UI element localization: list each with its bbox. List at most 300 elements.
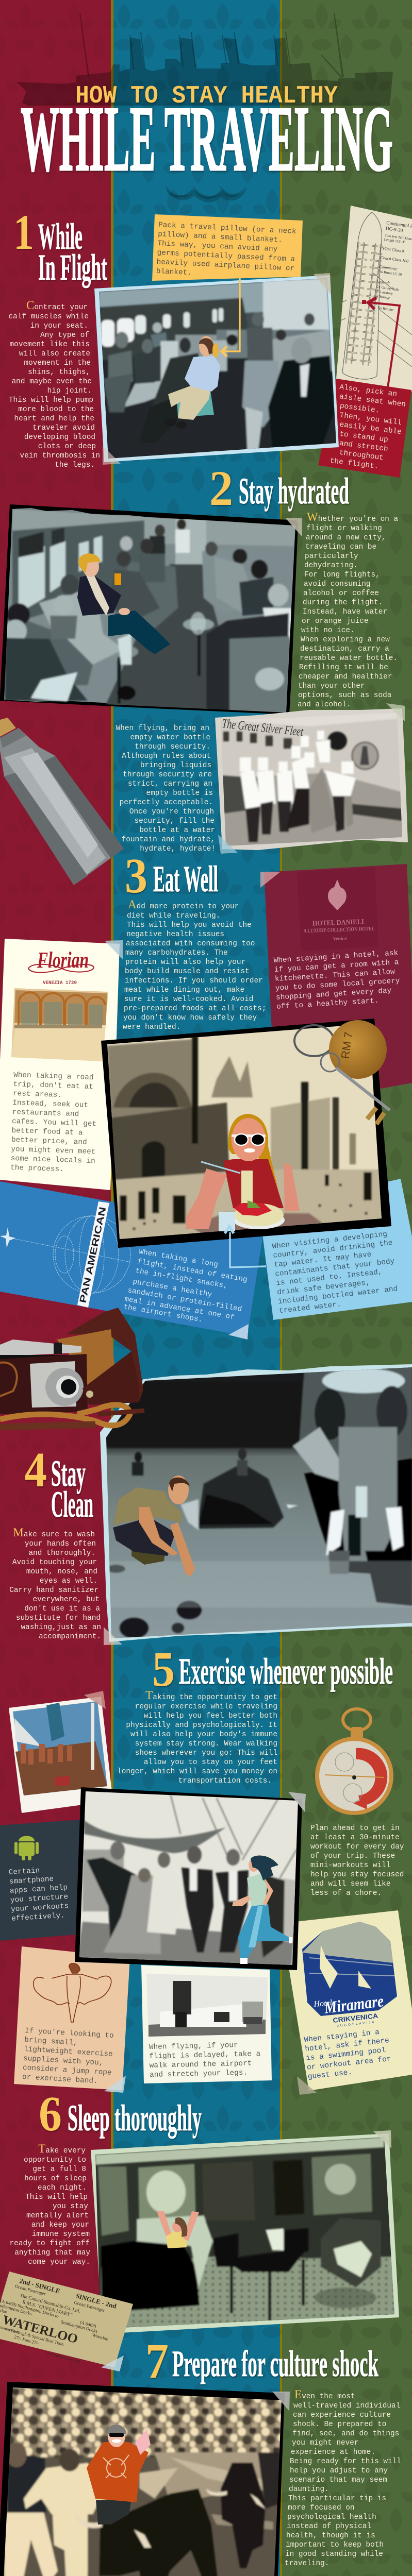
text: calf muscles: movement in the	[24, 359, 91, 367]
text: calf muscles: vein thrombosis in	[20, 452, 100, 460]
text: exercise: system stay strong. Wear walking	[135, 1740, 277, 1748]
icon: hotel crest	[328, 879, 347, 910]
text: exercise: shoes wherever you go: This will	[135, 1749, 277, 1757]
panel: android apps: smartphone	[9, 1875, 54, 1886]
text: culture shock: This particular tip is	[288, 2495, 386, 2503]
illustrated woman eating	[186, 1114, 300, 1231]
text: exercise: regular exercise while traveling	[135, 1703, 277, 1711]
panel: airport card: walk around the airport	[150, 2059, 252, 2070]
panel: jump rope card: If you're looking to	[25, 2027, 114, 2040]
panel: jump rope card: consider a jump rope	[23, 2064, 112, 2077]
text: Clean	[51, 1484, 93, 1525]
text: calf muscles	[9, 299, 100, 469]
panel: pan american	[0, 1181, 263, 1335]
panel: florian card: better price, and	[11, 1136, 87, 1147]
text: culture shock: daunting.	[289, 2485, 329, 2494]
text: culture shock: experience at home.	[291, 2448, 375, 2456]
panel: android apps: apps can help	[10, 1884, 68, 1895]
text: culture shock: can experience culture	[293, 2411, 391, 2419]
text: culture shock: help you adjust to any	[290, 2467, 388, 2475]
text: plan ahead: less of a chore.	[310, 1889, 382, 1897]
panel: pan american: flight, instead of eating	[137, 1258, 248, 1284]
seat map: No Recline	[377, 306, 394, 312]
icon: waterloo ticket: Southampton Docks	[60, 2319, 98, 2334]
illustrated tourist	[87, 2425, 151, 2524]
callout: aisle seat: the flight.	[329, 457, 379, 471]
panel: airport card: flight is delayed, take a	[149, 2050, 261, 2061]
panel: light blue card: tap water. It may have	[274, 1250, 372, 1269]
heading: 1 while in flight	[13, 205, 107, 288]
panel: light blue card: is not used to. Instead,	[276, 1268, 383, 1288]
icon: android robot	[14, 1836, 39, 1860]
heading: 3 eat well	[125, 848, 218, 903]
text: eat well: Add more protein to your	[128, 898, 239, 911]
text: stay clean: Avoid touching your	[12, 1558, 97, 1567]
panel: hotel danieli: A LUXURY COLLECTION HOTEL	[303, 926, 375, 934]
text: calf muscles: clots or deep	[38, 443, 96, 451]
text: calf muscles: more blood to the	[18, 405, 94, 414]
text: stay hydrated: Whether you're on a	[307, 511, 399, 523]
arrow: safe water	[225, 1226, 266, 1267]
text: calf muscles: and maybe even the	[12, 378, 92, 386]
callout: travel pillow: germs potentially passed from a	[157, 249, 295, 264]
text: eat well: meat while dining out, make	[124, 986, 244, 994]
callout: aisle seat	[318, 379, 411, 478]
seat map: Length 119'-3"	[384, 238, 406, 245]
callout: travel pillow: blanket.	[156, 267, 192, 277]
text: plan ahead: Plan ahead to get in	[310, 1824, 400, 1833]
panel: pan american: meal in advance at one of	[124, 1295, 235, 1322]
text: stay clean: washing,just as an	[21, 1623, 101, 1632]
heading: 3 eat well: 3	[125, 848, 147, 903]
panel: light blue card: country, avoid drinking the	[273, 1239, 393, 1260]
text: plan ahead: at least a 30-minute	[310, 1834, 400, 1842]
photo: elephants	[100, 1364, 412, 1645]
panel: hotel miramare: hotel, ask if there	[305, 2037, 390, 2054]
panel: hotel danieli: HOTEL DANIELI	[312, 918, 364, 928]
text: culture shock: more focused on	[288, 2504, 355, 2512]
text: stay clean: everywhere, but	[32, 1596, 100, 1604]
callout: aisle seat: easily be able	[339, 421, 402, 436]
heading: 4 stay clean: Stay	[51, 1453, 86, 1494]
text: sleep thoroughly: This will help	[25, 2193, 88, 2201]
panel: florian card: better food at a	[11, 1127, 83, 1138]
text: stay clean: Make sure to wash	[13, 1526, 95, 1539]
text: plan ahead: of your trip. These	[310, 1852, 395, 1860]
icon: waterloo ticket: For conditions see over	[46, 2351, 80, 2364]
text: calf muscles: movement like this	[10, 341, 90, 349]
photo: venice square	[101, 1019, 391, 1248]
text: stay hydrated: around a new city,	[306, 534, 386, 542]
heading: 5 exercise: 5	[152, 1641, 175, 1697]
icon: stopwatch	[315, 1709, 393, 1815]
panel: hotel danieli: you to do some local grocery	[275, 977, 400, 993]
text: water bottle: Although rules about	[122, 752, 211, 760]
text: sleep thoroughly: ready to fight off	[10, 2240, 90, 2248]
text: water bottle	[116, 724, 216, 853]
text: stay clean	[9, 1526, 101, 1641]
text: water bottle: Once you're through	[129, 808, 214, 816]
text: calf muscles: Any type of	[40, 331, 89, 340]
text: eat well: This will help you avoid the	[127, 921, 252, 929]
panel: florian card: trip, don't eat at	[13, 1080, 93, 1091]
text: stay hydrated: destination, carry a	[300, 645, 389, 653]
heading: 6 sleep thoroughly: 6	[39, 2086, 62, 2141]
panel: florian card: you might even meet	[11, 1145, 96, 1156]
text: eat well: were handled.	[123, 1023, 180, 1031]
callout: aisle seat: to stand up	[339, 430, 389, 444]
text: stay hydrated: than your other	[298, 682, 365, 690]
icon: waterloo ticket: SINGLE - 2nd	[75, 2292, 118, 2310]
text: water bottle: bottle at a water	[139, 826, 215, 835]
text: eat well: many carbohydrates. The	[125, 949, 228, 957]
text: stay clean: and thoroughly.	[28, 1549, 95, 1557]
text: calf muscles: will also create	[19, 350, 90, 358]
text: stay clean: don't use it as a	[24, 1605, 100, 1613]
callout: aisle seat: throughout	[339, 449, 384, 462]
panel: light blue card: When visiting a developing	[272, 1230, 388, 1251]
panel: pan american: the airport shops.	[123, 1303, 203, 1325]
text: exercise: Taking the opportunity to get	[145, 1689, 277, 1702]
panel: hotel danieli: shopping and get every day	[276, 987, 392, 1002]
text: sleep thoroughly: and keep your	[31, 2221, 89, 2229]
label: miramare badge: Hotel	[313, 1998, 333, 2009]
panel: florian card: restaurants and	[12, 1108, 79, 1118]
heading: 2 stay hydrated	[209, 461, 349, 516]
panel: florian card: Florian	[37, 947, 89, 973]
text: stay hydrated: alcohol or coffee	[303, 589, 379, 598]
illustrated man	[113, 1476, 195, 1577]
text: exercise: transportation costs.	[178, 1777, 272, 1785]
seat map: Comments:	[379, 264, 398, 272]
text: sleep thoroughly: get a full 8	[32, 2165, 86, 2174]
panel: android apps: effectively.	[11, 1912, 65, 1923]
panel: android apps: Certain	[8, 1867, 40, 1877]
panel: android apps: you structure	[10, 1893, 69, 1905]
icon: globe and plane	[10, 1216, 131, 1293]
text: stay clean: substitute for hand	[16, 1614, 101, 1622]
illustrated runner	[232, 1855, 292, 1964]
text: eat well	[123, 898, 266, 1031]
text: calf muscles: hip joint.	[47, 387, 92, 395]
panel: jump rope card: supplies with you,	[23, 2055, 104, 2067]
text: water bottle: empty water bottle	[130, 734, 210, 742]
callout: aisle seat: and stretch	[339, 439, 388, 453]
text: stay hydrated: For long flights,	[304, 571, 380, 579]
text: culture shock: find, see, and do things	[292, 2430, 399, 2438]
heading: 1 while in flight: While	[38, 216, 83, 257]
panel: hotel miramare: guest use.	[307, 2069, 353, 2081]
icon: camera	[0, 1308, 144, 1427]
icon: waterloo ticket: 27/- Fare 27/-	[13, 2334, 40, 2346]
panel: pan american: When taking a long	[138, 1248, 219, 1269]
text: calf muscles: This will help pump	[9, 396, 93, 404]
text: stay hydrated	[298, 511, 399, 709]
panel: jump rope card: or exercise band.	[22, 2073, 98, 2086]
panel: light blue card	[258, 1179, 412, 1320]
text: plan ahead: help you stay focused	[310, 1871, 404, 1879]
text: culture shock: health, though it is	[286, 2532, 375, 2540]
panel: florian card: some nice locals in	[10, 1155, 95, 1165]
panel: jump rope card: bring small,	[24, 2036, 78, 2047]
icon: waterloo ticket: R.M.S. "QUEEN MARY"	[22, 2300, 73, 2318]
panel: jump rope card	[14, 1946, 130, 2090]
panel: hotel miramare: When staying in a	[304, 2028, 380, 2044]
text: stay clean: accompaniment.	[39, 1633, 101, 1641]
text: water bottle: empty bottle is	[146, 789, 213, 798]
label: miramare badge: CRIKVENICA	[333, 2012, 378, 2024]
panel: light blue card: including bottled water and	[277, 1285, 398, 1306]
text: eat well: associated with consuming too	[126, 940, 255, 948]
text: exercise: longer, which will save you money on	[117, 1768, 277, 1776]
text: stay hydrated: traveling can be	[305, 543, 376, 551]
text: eat well: infections. If you should order	[125, 977, 263, 985]
text: calf muscles: traveler avoid	[32, 424, 95, 432]
panel: hotel miramare	[282, 1910, 412, 2091]
text: culture shock	[285, 2388, 401, 2568]
text: stay hydrated: options, such as soda	[298, 691, 392, 700]
painting: cafe arcade	[11, 988, 108, 1061]
panel: florian card: Instead, seek out	[12, 1099, 88, 1110]
text: stay hydrated: avoid consuming	[304, 580, 371, 588]
text: calf muscles: developing blood	[24, 433, 95, 442]
photo: great silver fleet	[215, 703, 408, 855]
text: sleep thoroughly: opportunity to	[24, 2156, 86, 2164]
text: plan ahead: and will seem like	[310, 1880, 390, 1888]
text: eat well: you don't know how safely they	[123, 1014, 257, 1022]
text: exercise: will also help your body's immune	[130, 1731, 277, 1739]
text: water bottle: strict, carrying an	[128, 780, 212, 788]
panel: hotel danieli: Venice	[333, 936, 347, 942]
text: culture shock: scenario that may seem	[289, 2476, 387, 2484]
icon: waterloo ticket: (A 6469) Southampton Docks to	[0, 2298, 60, 2319]
panel: light blue card: contaminants that your body	[275, 1258, 395, 1279]
text: exercise: will help you feel better both	[144, 1712, 277, 1720]
text: sleep thoroughly: immune system	[32, 2230, 90, 2239]
panel: hotel danieli	[264, 864, 412, 1089]
icon: waterloo ticket: WATERLOO	[1, 2313, 79, 2346]
text: stay hydrated: Instead, have water	[303, 608, 387, 616]
text: water bottle: perfectly acceptable.	[120, 799, 213, 807]
text: stay hydrated: and alcohol.	[298, 701, 351, 709]
callout: travel pillow: heavily used airplane pillow or	[156, 258, 294, 273]
icon: waterloo ticket: Waterloo	[91, 2332, 109, 2342]
panel: pan american: the in-flight snacks,	[135, 1267, 228, 1291]
panel: android apps	[0, 1820, 80, 1941]
text: sleep thoroughly: each night.	[38, 2184, 87, 2192]
text: eat well: pre-prepared foods at all costs;	[124, 1005, 266, 1013]
text: stay clean: eyes as well.	[40, 1577, 97, 1585]
panel: hotel danieli: off to a healthy start.	[276, 997, 379, 1011]
icon: waterloo ticket: (A 6469)	[79, 2319, 97, 2329]
panel: pan american: sandwich or protein-filled	[127, 1286, 242, 1314]
heading: 2 stay hydrated: 2	[209, 461, 233, 516]
text: stay hydrated: flight or walking	[306, 524, 382, 533]
panel: florian card: VENEZIA 1720	[43, 980, 77, 986]
text: stay hydrated: with no ice.	[301, 626, 355, 635]
text: calf muscles: calf muscles while	[9, 313, 89, 321]
text: calf muscles: Contract your	[26, 299, 88, 312]
text: exercise: physically and psychologically. It	[126, 1721, 277, 1730]
text: culture shock: you might never	[292, 2439, 359, 2447]
callout: travel pillow: pillow) and a small blanket.	[158, 230, 283, 245]
panel: florian card	[0, 939, 120, 1190]
text: exercise: allow you to stay on your feet	[144, 1758, 277, 1767]
text: Eat Well	[153, 858, 218, 900]
panel: airport card: When flying, if your	[149, 2041, 238, 2052]
seat map: First Class 8	[382, 246, 404, 253]
panel: airport card	[141, 1965, 272, 2083]
text: culture shock: in good standing while	[285, 2550, 383, 2558]
text: stay hydrated: dehydrating.	[304, 562, 358, 570]
text: plan ahead: workout for every day	[310, 1843, 404, 1851]
illustration: jump rope girl	[34, 1963, 111, 2022]
seat map	[336, 206, 412, 392]
icon: waterloo ticket: 2nd - SINGLE	[19, 2277, 61, 2295]
text: stay hydrated: particularly	[305, 552, 358, 561]
icon: room key: RM 7	[339, 1031, 355, 1060]
text: sleep thoroughly: anything that may	[14, 2249, 90, 2257]
panel: pan american: PAN AMERICAN	[77, 1206, 108, 1304]
text: sleep thoroughly	[10, 2142, 90, 2266]
callout: aisle seat: aisle seat when	[339, 393, 406, 409]
icon: waterloo ticket: Ocean Passenger	[14, 2283, 46, 2297]
text: eat well: sure it is well-cooked. Avoid	[124, 995, 253, 1004]
text: sleep thoroughly: mentally alert	[26, 2212, 89, 2220]
panel: florian card: When taking a road	[13, 1071, 94, 1082]
text: culture shock: important to keep both	[286, 2541, 384, 2549]
panel: hotel danieli: if you can get a room with a	[274, 958, 399, 974]
panel: hotel danieli: When staying in a hotel, ask	[273, 949, 399, 965]
icon: metal bottle	[0, 718, 124, 885]
ship silhouette	[17, 13, 393, 106]
text: stay hydrated: cheaper and healthier	[299, 673, 392, 681]
seat map: ST Storage	[374, 294, 390, 300]
photo: airplane cabin	[94, 275, 340, 464]
panel: light blue card: treated water.	[278, 1300, 341, 1315]
heading: 4 stay clean	[24, 1442, 93, 1525]
text: water bottle: through security are	[123, 771, 212, 779]
text: sleep thoroughly: come your way.	[28, 2258, 90, 2266]
text: eat well: diet while traveling.	[127, 912, 220, 920]
seat map: Legend:	[376, 279, 390, 285]
label: miramare badge	[302, 1922, 397, 2028]
text: stay clean: mouth, nose, and	[26, 1568, 97, 1576]
text: calf muscles: shins, thighs,	[28, 368, 90, 377]
photo: great silver fleet: The Great Silver Fleet	[221, 717, 304, 739]
text: culture shock: instead of physical	[287, 2522, 371, 2531]
panel: android apps: your workouts	[11, 1902, 69, 1914]
text: stay hydrated: or orange juice	[302, 617, 369, 625]
panel: jump rope card: lightweight exercise	[24, 2045, 113, 2059]
text: culture shock: well-traveled individual	[293, 2402, 400, 2410]
text: exercise	[117, 1689, 277, 1785]
text: stay hydrated: during the flight.	[303, 599, 383, 607]
text: stay clean: Carry hand sanitizer	[9, 1586, 98, 1595]
text: stay hydrated: Refilling it will be	[299, 664, 388, 672]
panel: hotel miramare: is a swimming pool	[306, 2046, 386, 2063]
tape corners	[103, 273, 331, 465]
callout: travel pillow	[152, 214, 303, 282]
icon: waterloo ticket	[0, 2272, 133, 2369]
text: sleep thoroughly: Take every	[38, 2142, 86, 2155]
arrow: aisle seat	[368, 298, 400, 387]
text: Sleep thoroughly	[68, 2097, 202, 2139]
text: water bottle: hydrate, hydrate!	[140, 845, 216, 853]
photo: running of the bulls	[0, 2382, 290, 2576]
arrow: pillow	[222, 278, 240, 357]
text: stay clean: your hands often	[25, 1540, 96, 1548]
icon: waterloo ticket: via Eastleigh & Special Boat Train	[4, 2326, 64, 2347]
seat map: Coach Class 100	[380, 255, 409, 264]
heading: 6 sleep thoroughly	[39, 2086, 202, 2141]
heading: 1 while in flight: 1	[13, 205, 34, 260]
text: water bottle: fountain and hydrate,	[122, 836, 215, 844]
text: water bottle: bringing liquids	[140, 761, 211, 770]
text: water bottle: through security.	[135, 743, 210, 751]
label: miramare badge: Miramare	[323, 1991, 385, 2017]
heading: 4 stay clean: 4	[24, 1442, 47, 1497]
illustrated waking woman	[157, 2211, 199, 2248]
text: culture shock: psychological health	[287, 2513, 376, 2521]
text: calf muscles: in your seat.	[30, 322, 88, 330]
seat map: LV Lavatory	[374, 289, 393, 296]
illustrated woman with juice	[77, 553, 170, 654]
panel: hotel danieli: kitchenette. This can allow	[275, 968, 395, 984]
label: miramare badge: JUGOSLAVIJA	[337, 2021, 374, 2028]
panel: pan american: purchase a healthy	[132, 1278, 212, 1299]
callout: travel pillow: This way, you can avoid any	[157, 240, 278, 253]
waves	[165, 185, 247, 202]
icon: waterloo ticket: The Cunard Steamship Co. Ltd.	[19, 2293, 81, 2314]
text: sleep thoroughly: you stay	[53, 2202, 88, 2211]
text: culture shock: traveling.	[285, 2560, 329, 2568]
text: water bottle: security, fill the	[135, 817, 215, 825]
photo: train car	[0, 504, 302, 716]
seat map: No Rows 13, 20	[378, 269, 402, 277]
title: HOW TO STAY HEALTHY	[75, 82, 338, 110]
text: In Flight	[38, 247, 107, 288]
text: water bottle: When flying, bring an	[116, 724, 209, 733]
text: culture shock: Even the most	[294, 2388, 355, 2401]
panel: florian card: cafes. You will get	[12, 1117, 96, 1128]
text: stay hydrated: reusable water bottle.	[300, 654, 398, 663]
callout: aisle seat: Also, pick an	[339, 383, 398, 399]
text: eat well: negative health issues	[126, 930, 224, 939]
text: culture shock: Being ready for this will	[290, 2458, 401, 2466]
heading: 7 culture shock	[145, 2333, 378, 2388]
panel: hotel miramare: or workout area for	[306, 2055, 391, 2072]
seat map: GS Galley/Bulk	[375, 284, 399, 292]
text: plan ahead	[310, 1824, 404, 1897]
callout: travel pillow: Pack a travel pillow (or a neck	[158, 221, 296, 236]
panel: florian card: the process.	[10, 1164, 64, 1174]
heading: 7 culture shock: 7	[145, 2333, 169, 2388]
callout: aisle seat: Then, you will	[339, 412, 402, 427]
text: culture shock: shock. Be prepared to	[293, 2420, 386, 2429]
callout: aisle seat: possible.	[339, 402, 380, 415]
text: plan ahead: mini-workouts will	[310, 1861, 390, 1870]
photo: ship deck group	[75, 1787, 306, 1970]
photo: hotel room	[91, 2130, 399, 2334]
panel: airport card: and stretch your legs.	[150, 2069, 248, 2079]
text: calf muscles: heart and help the	[14, 415, 94, 423]
icon: room key	[294, 1020, 390, 1124]
text: sleep thoroughly: hours of sleep	[24, 2175, 87, 2183]
panel: light blue card: drink safe beverages,	[277, 1279, 371, 1297]
text: eat well: body build muscle and resist	[125, 968, 250, 976]
seat map: DC-9-30	[385, 226, 403, 234]
